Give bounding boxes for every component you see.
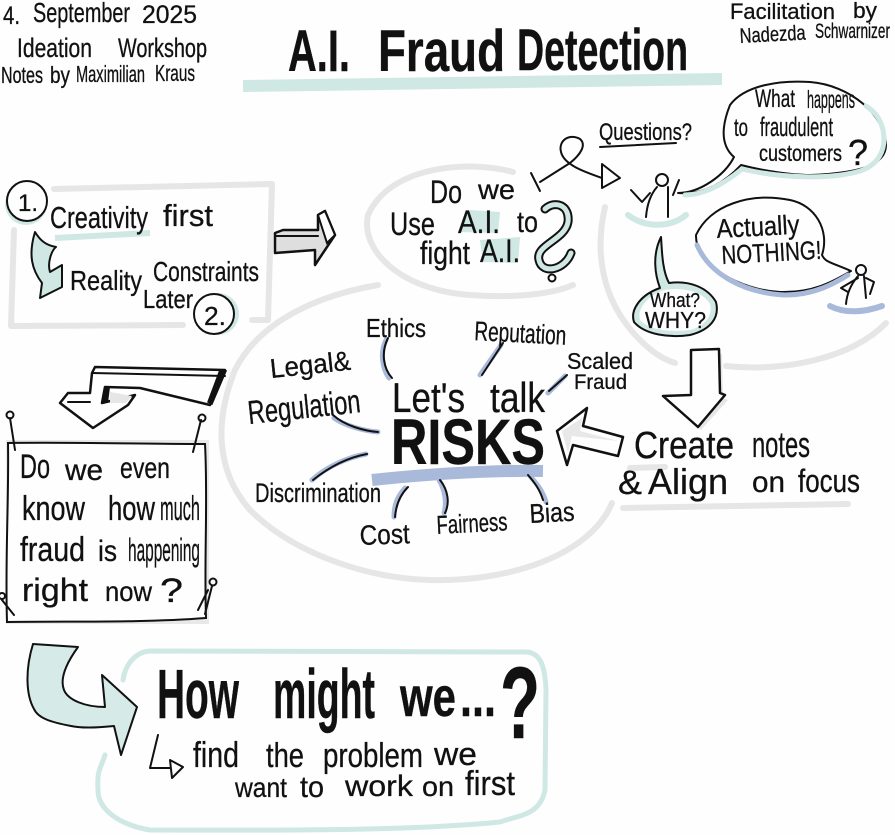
risk labels: Regulation xyxy=(246,382,362,431)
risk labels: Ethics xyxy=(366,313,426,343)
reality constraints text: Constraints xyxy=(153,256,259,287)
questions label: Questions? xyxy=(599,119,692,146)
icon: person asking xyxy=(628,174,686,225)
arrow: big down xyxy=(663,349,728,430)
header notes: date, workshop, author: Ideation xyxy=(17,33,92,63)
how might we subtext: want xyxy=(234,772,287,803)
how might we subtext: work xyxy=(344,770,414,803)
how might we heading: How xyxy=(157,655,239,733)
panel: pinned note: how xyxy=(108,490,155,528)
arrow: 3d right xyxy=(275,211,335,265)
speech bubble: actually nothing: Actually xyxy=(716,210,801,244)
panel: pinned note: now xyxy=(105,576,153,607)
title: Detection xyxy=(517,18,688,83)
icon: person answering xyxy=(830,265,882,311)
creativity heading: first xyxy=(163,198,213,233)
how might we heading: ... xyxy=(460,665,496,728)
panel: creativity first xyxy=(5,181,272,335)
connectors xyxy=(312,338,567,517)
how might we subtext: we xyxy=(433,736,477,772)
title xyxy=(243,18,722,86)
speech bubble: actually nothing xyxy=(696,198,851,295)
speech bubble: fraudulent customers: to xyxy=(734,114,748,142)
text: create notes and align: Align xyxy=(648,461,728,502)
risk labels: Fairness xyxy=(436,506,508,540)
risk labels: Fraud xyxy=(574,371,627,394)
risk labels: Discrimination xyxy=(255,478,381,508)
panel: pinned note: ? xyxy=(160,572,183,610)
title: Fraud xyxy=(378,19,505,84)
panel: do we use AI question: A.I. xyxy=(480,233,520,269)
text: create notes and align: Create xyxy=(634,425,734,467)
speech bubble: fraudulent customers: ? xyxy=(848,132,868,173)
panel: do we use AI question: to xyxy=(517,206,538,239)
icon: teal down arrow xyxy=(31,232,62,298)
speech bubble: what why: WHY? xyxy=(645,307,706,333)
reality constraints text: Reality xyxy=(70,265,142,296)
panel: do we use AI question: A.I. xyxy=(458,204,500,240)
speech bubble: fraudulent customers: What xyxy=(755,85,795,113)
header notes: date, workshop, author: Workshop xyxy=(118,33,207,63)
grey flow arcs xyxy=(601,207,886,367)
risk labels: Legal& xyxy=(268,346,352,384)
risk labels: Bias xyxy=(529,497,575,529)
panel: do we use AI question: Do xyxy=(430,174,462,210)
number badge 1 xyxy=(5,181,47,225)
pins xyxy=(0,412,216,615)
arrow: teal curved xyxy=(27,644,137,755)
creativity heading: Creativity xyxy=(50,200,148,235)
risks heading: talk xyxy=(490,374,546,421)
panel: pinned note: fraud xyxy=(20,531,85,569)
how might we subtext: the xyxy=(266,737,304,775)
header notes: date, workshop, author: 4. xyxy=(3,2,20,30)
panel: do we use AI question: fight xyxy=(420,235,470,271)
panel: pinned note: much xyxy=(160,490,200,528)
panel: pinned note: is xyxy=(98,535,117,568)
icon: big question mark xyxy=(539,205,571,282)
how might we heading: ? xyxy=(500,646,540,760)
risk labels xyxy=(246,313,633,551)
text: create notes and align: focus xyxy=(798,463,860,499)
risk labels: Scaled xyxy=(567,348,633,374)
header notes: date, workshop, author: by xyxy=(50,62,70,88)
number badge 1: 1. xyxy=(18,190,38,217)
reality constraints text: Later xyxy=(143,284,193,314)
speech bubble: fraudulent customers: customers xyxy=(759,140,842,166)
speech bubble: fraudulent customers xyxy=(678,82,886,195)
panel: do we use AI question xyxy=(367,167,573,296)
text: create notes and align: on xyxy=(752,466,785,499)
header notes: date, workshop, author: 2025 xyxy=(142,1,197,29)
header notes: date, workshop, author xyxy=(1,0,207,88)
panel: pinned note: we xyxy=(64,454,103,487)
how might we subtext: find xyxy=(193,734,239,775)
panel: how might we xyxy=(98,646,546,830)
text: create notes and align: notes xyxy=(752,424,810,465)
number badge 2 xyxy=(194,293,239,335)
panel: pinned note: know xyxy=(22,490,85,528)
header notes: date, workshop, author: Notes xyxy=(1,62,43,88)
panel: pinned note: Do xyxy=(20,448,50,486)
panel: do we use AI question: we xyxy=(477,174,515,205)
panel: do we use AI question: Use xyxy=(390,206,435,242)
how might we subtext: on xyxy=(422,771,454,802)
facilitation credit xyxy=(730,0,890,48)
facilitation credit: Nadezda xyxy=(739,22,806,48)
number badge 2: 2. xyxy=(204,301,226,331)
panel: pinned note: happening xyxy=(128,532,200,568)
risk labels: Reputation xyxy=(474,316,567,351)
text: create notes and align: & xyxy=(618,464,642,502)
text: create notes and align xyxy=(618,424,860,508)
how might we subtext xyxy=(193,734,515,804)
header notes: date, workshop, author: Maximilian xyxy=(76,61,145,87)
risks heading: Let's xyxy=(392,374,465,421)
panel: pinned note: even xyxy=(120,452,170,485)
header notes: date, workshop, author: Kraus xyxy=(155,60,195,86)
speech bubble: fraudulent customers: fraudulent xyxy=(760,112,833,142)
panel: risks mind map xyxy=(221,285,633,580)
how might we heading: we xyxy=(399,665,456,728)
how might we subtext: first xyxy=(465,765,515,803)
title: A.I. xyxy=(288,19,350,84)
icon: small pointer arrow xyxy=(150,735,183,778)
risk labels: Cost xyxy=(359,518,410,551)
arrow: loop to questions xyxy=(531,137,620,191)
creativity heading xyxy=(50,198,213,238)
panel: pinned note xyxy=(0,412,216,624)
arrow: 3d bent down xyxy=(60,367,226,428)
how might we heading: might xyxy=(273,655,375,733)
reality constraints text xyxy=(70,256,259,314)
risks heading: RISKS xyxy=(391,406,545,478)
speech bubble: actually nothing: NOTHING! xyxy=(721,235,822,270)
speech bubble: what why: What? xyxy=(650,290,700,312)
speech bubble: what why xyxy=(633,237,717,336)
risks heading xyxy=(372,374,546,480)
arrow: left to risks xyxy=(557,408,623,465)
how might we heading xyxy=(157,646,540,760)
panel: pinned note: right xyxy=(22,572,88,608)
how might we subtext: problem xyxy=(323,737,423,775)
how might we subtext: to xyxy=(300,771,324,804)
